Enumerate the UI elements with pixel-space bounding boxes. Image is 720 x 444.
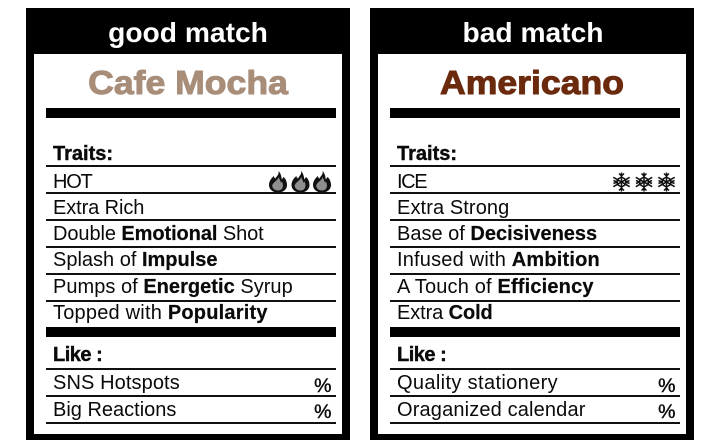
heading: like: Like : <box>53 344 102 366</box>
heading: bad match: bad match <box>463 16 603 48</box>
percent sign: % <box>314 375 332 397</box>
trait: Pumps of Energetic Syrup: Pumps of Energetic Syrup <box>53 276 293 298</box>
heading: good match: good match <box>108 16 268 48</box>
trait: Splash of Impulse: Splash of Impulse <box>53 249 218 271</box>
panel: good match <box>26 8 350 440</box>
heading: like: Like : <box>397 344 446 366</box>
trait: Double Emotional Shot: Double Emotional Shot <box>53 223 264 245</box>
percent sign: % <box>658 401 676 423</box>
icons: three flames <box>269 171 331 192</box>
icons: three snowflakes <box>613 172 675 192</box>
like item: Big Reactions: Big Reactions <box>53 399 176 421</box>
percent sign: % <box>658 375 676 397</box>
drink name: Americano: Americano <box>440 65 624 102</box>
drink name: Cafe Mocha: Cafe Mocha <box>88 65 288 102</box>
panel body: Cafe Mocha <box>34 54 342 434</box>
like item: Quality stationery: Quality stationery <box>397 372 558 394</box>
trait: Extra Strong: Extra Strong <box>397 197 509 219</box>
percent sign: % <box>314 401 332 423</box>
heading: traits: Traits: <box>397 143 457 165</box>
panel body: Americano <box>378 54 686 434</box>
trait: Topped with Popularity: Topped with Popularity <box>53 302 268 324</box>
trait: Base of Decisiveness: Base of Decisiveness <box>397 223 597 245</box>
trait: Extra Rich: Extra Rich <box>53 197 144 219</box>
like item: Oraganized calendar: Oraganized calendar <box>397 399 586 421</box>
trait: Infused with Ambition: Infused with Ambition <box>397 249 600 271</box>
trait: ICE: ICE <box>397 171 426 193</box>
like item: SNS Hotspots: SNS Hotspots <box>53 372 180 394</box>
panel: bad match <box>370 8 694 440</box>
trait: A Touch of Efficiency: A Touch of Efficiency <box>397 276 594 298</box>
trait: HOT: HOT <box>53 171 92 193</box>
heading: traits: Traits: <box>53 143 113 165</box>
trait: Extra Cold: Extra Cold <box>397 302 493 324</box>
